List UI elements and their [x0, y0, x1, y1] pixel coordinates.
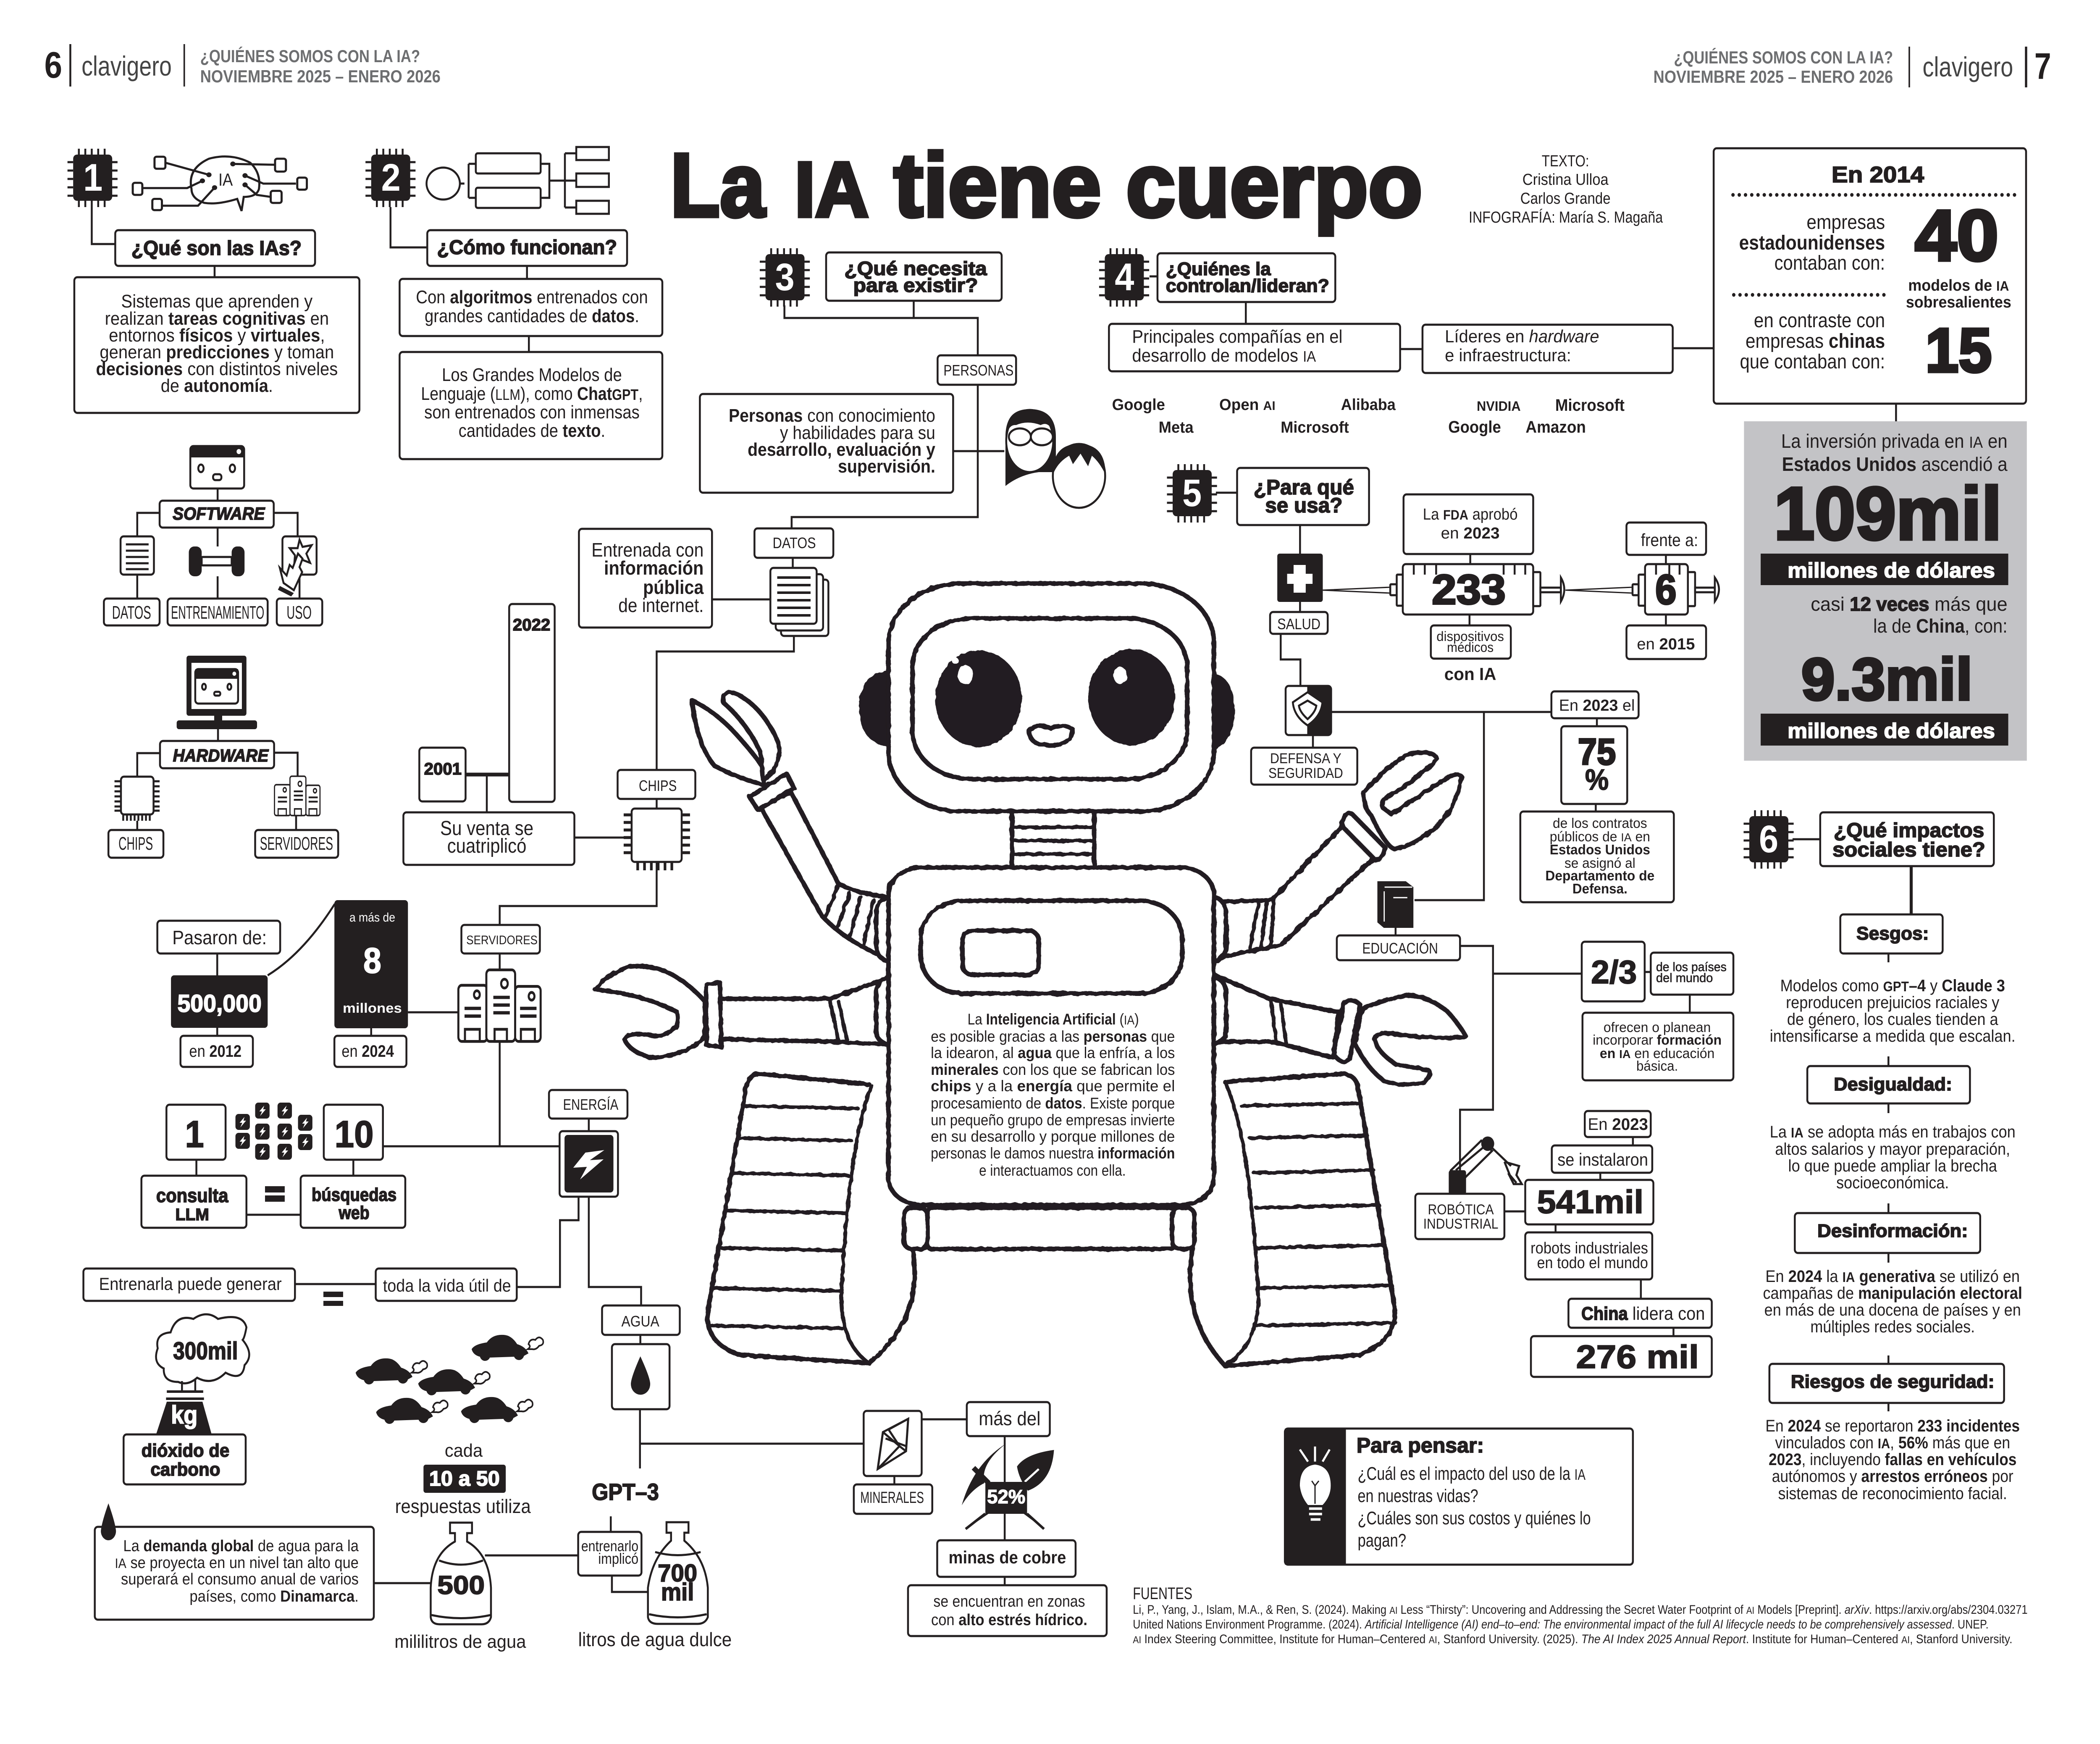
panel: water demand: GPT–3: [592, 1479, 659, 1505]
icon: people: [1005, 409, 1105, 508]
panel: models in 2014: en contraste con: [1754, 309, 1885, 331]
text: robot chest: La Inteligencia Artificial (IA): [968, 1011, 1139, 1028]
panel: section 5 what it is used for: en 2023: [1441, 524, 1500, 542]
panel: models in 2014: 15: [1925, 315, 1992, 385]
panel: section 5 what it is used for: En 2023 el: [1559, 696, 1635, 714]
header left: ¿QUIÉNES SOMOS CON LA IA?: [200, 46, 420, 66]
header left: NOVIEMBRE 2025 – ENERO 2026: [200, 67, 441, 86]
chart: chip sales 2001 vs 2022: 2001: [424, 760, 462, 778]
icon: monitor: [177, 656, 257, 729]
icon: gem: [878, 1419, 908, 1469]
panel: carbon emissions: respuestas utiliza: [395, 1496, 531, 1517]
text: robot chest: [931, 1011, 1175, 1179]
panel: section 1 what are AIs: decisiones con distintos niveles: [96, 358, 338, 379]
icon: energy tiles: [236, 1103, 312, 1160]
robot ears: [859, 670, 1234, 751]
text: model companies: Microsoft: [1281, 418, 1349, 436]
panel: servers: millones: [343, 1001, 402, 1016]
panel: energy comparison: consulta: [156, 1185, 228, 1206]
header right: 7: [2034, 45, 2051, 87]
panel: section 3 what it needs: DATOS: [773, 535, 816, 552]
panel: section 2 how they work: Los Grandes Modelos de: [442, 364, 622, 385]
text: robot chest: en su desarrollo y porque millones de: [931, 1128, 1175, 1145]
chart: chip sales 2001 vs 2022: [403, 604, 575, 865]
panel: minerals: minas de cobre: [949, 1548, 1066, 1567]
title: tiene cuerpo: [894, 135, 1423, 236]
panel: education: 2/3: [1591, 954, 1637, 990]
text: robot chest: e interactuamos con ella.: [979, 1162, 1126, 1179]
panel: education: ofrecen o planean: [1604, 1020, 1711, 1035]
panel: models in 2014: que contaban con:: [1740, 350, 1885, 373]
panel: section 3 what it needs: CHIPS: [639, 778, 677, 794]
panel: section 2 how they work: 2: [381, 156, 401, 199]
panel: section 4 who leads: e infraestructura:: [1445, 346, 1571, 365]
panel: hardware: CHIPS: [118, 833, 153, 854]
panel: section 4 who leads: Principales compañías en el: [1132, 326, 1342, 347]
panel: section 1 what are AIs: generan predicciones y toman: [100, 341, 334, 362]
robot neck: [1012, 809, 1094, 870]
text: model companies: Open AI: [1219, 395, 1276, 413]
robot head: [888, 583, 1214, 811]
text: robot chest: minerales con los que se fabrican los: [931, 1061, 1175, 1078]
subsection: riesgos de seguridad: vinculados con IA, 56% más que en: [1775, 1434, 2010, 1452]
panel: energy comparison: [142, 1090, 627, 1228]
text: robot chest: la idearon, al agua que la enfría, a los: [931, 1044, 1175, 1061]
text: robot chest: personas le damos nuestra información: [931, 1145, 1175, 1162]
subsection: desinformacion: [1763, 1213, 2022, 1336]
panel: section 5 what it is used for: Departamento de: [1545, 868, 1654, 883]
panel: education: básica.: [1636, 1058, 1678, 1074]
panel: section 5 what it is used for: 75: [1578, 731, 1616, 772]
panel: section 3 what it needs: [403, 248, 1105, 870]
panel: water demand: superará el consumo anual de varios: [121, 1570, 359, 1588]
panel: education: EDUCACIÓN: [1362, 940, 1438, 957]
panel: industrial robotics: China lidera con: [1581, 1303, 1705, 1324]
panel: private investment: casi 12 veces más que: [1811, 594, 2008, 615]
header right: ¿QUIÉNES SOMOS CON LA IA?: [1674, 47, 1893, 67]
panel: private investment: Estados Unidos ascendió a: [1782, 454, 2008, 475]
panel: industrial robotics: En 2023: [1588, 1115, 1648, 1134]
icon: software window: [190, 446, 244, 489]
subsection: sesgos: reproducen prejuicios raciales y: [1786, 993, 1999, 1012]
text: hardware companies: NVIDIA: [1477, 399, 1521, 414]
panel: section 5 what it is used for: 5: [1182, 471, 1202, 515]
robot body: [876, 867, 1226, 1249]
robot upper left arm: [692, 693, 888, 959]
icon: smoke cloud and chimney: kg: [171, 1401, 197, 1429]
subsection: sesgos: intensificarse a medida que escalan.: [1770, 1027, 2016, 1045]
icon: syringe 233: 233: [1432, 567, 1506, 613]
panel: section 5 what it is used for: DEFENSA Y: [1270, 751, 1341, 766]
icon: syringe 233: [1390, 564, 1564, 615]
panel: section 3 what it needs: desarrollo, evaluación y: [748, 439, 936, 460]
subsection: sesgos: [1770, 914, 2016, 1045]
chart: chip sales 2001 vs 2022: Su venta se: [440, 817, 533, 839]
panel: section 1 what are AIs: IA: [218, 170, 233, 189]
panel: servers: en 2012: [189, 1042, 242, 1061]
icon: health cross: [1277, 554, 1323, 602]
credits: INFOGRAFÍA: María S. Magaña: [1469, 208, 1663, 226]
panel: energy comparison: ENERGÍA: [563, 1096, 618, 1113]
panel: water demand: La demanda global de agua para la: [123, 1537, 359, 1555]
panel: section 2 how they work: grandes cantidades de datos.: [425, 305, 639, 326]
panel: water demand: países, como Dinamarca.: [189, 1587, 359, 1605]
subsection: sesgos: de género, los cuales tienden a: [1787, 1010, 1998, 1029]
panel: industrial robotics: 541mil: [1537, 1184, 1643, 1220]
text: sources: Li, P., Yang, J., Islam, M.A., & Ren, S. (2024). Making AI Less “Thirsty”: Uncovering and Addressing the Secret Water Footprint of AI Models [Preprint]. arXiv. https://arxiv.org/abs/2304.03271: [1133, 1603, 2028, 1617]
panel: private investment: La inversión privada en IA en: [1781, 431, 2008, 452]
panel: industrial robotics: robots industriales: [1530, 1239, 1648, 1257]
panel: education: en IA en educación: [1600, 1046, 1714, 1061]
panel: education: de los países: [1656, 960, 1727, 974]
subsection: desigualdad: [1770, 1066, 2016, 1192]
panel: energy comparison: web: [339, 1202, 370, 1223]
panel: section 2 how they work: Lenguaje (LLM), como ChatGPT,: [421, 383, 643, 404]
panel: minerals: [854, 1402, 1107, 1636]
panel: section 4 who leads: Líderes en hardware: [1445, 327, 1599, 346]
panel: section 2 how they work: son entrenados con inmensas: [424, 402, 640, 422]
panel: software: SOFTWARE: [173, 504, 265, 523]
panel: hardware: HARDWARE: [173, 746, 269, 765]
text: hardware companies: Microsoft: [1555, 396, 1625, 415]
text: robot chest: procesamiento de datos. Existe porque: [931, 1095, 1175, 1112]
robot upper right arm: [1214, 825, 1377, 959]
subsection: desinformacion: Desinformación:: [1817, 1220, 1968, 1241]
subsection: riesgos de seguridad: 2023, incluyendo fallas en vehículos: [1769, 1450, 2016, 1469]
icon: pickaxe and shovel: [962, 1444, 1054, 1529]
panel: section 3 what it needs: supervisión.: [838, 456, 935, 476]
panel: carbon emissions: 10 a 50: [429, 1467, 500, 1491]
text: robot chest: es posible gracias a las personas que: [931, 1028, 1175, 1045]
chart: chip sales 2001 vs 2022: cuatriplicó: [447, 835, 526, 857]
panel: section 1 what are AIs: entornos físicos y virtuales,: [109, 325, 325, 345]
panel: industrial robotics: ROBÓTICA: [1428, 1201, 1494, 1217]
chart: chip sales 2001 vs 2022: 2022: [513, 616, 550, 634]
panel: water demand: mililitros de agua: [394, 1631, 526, 1652]
robot lower right arm: [1214, 974, 1339, 1058]
icon: documents: [770, 568, 828, 636]
text: robot chest: chips y a la energía que permite el: [931, 1077, 1175, 1095]
panel: section 3 what it needs: ¿Qué necesita: [844, 258, 987, 279]
panel: private investment: millones de dólares: [1788, 720, 1995, 743]
panel: section 1 what are AIs: Sistemas que aprenden y: [121, 291, 312, 311]
panel: section 1 what are AIs: ¿Qué son las IAs?: [131, 237, 302, 259]
panel: water demand: implicó: [598, 1551, 638, 1567]
panel: section 1 what are AIs: de autonomía.: [161, 375, 273, 396]
panel: models in 2014: 40: [1915, 195, 1999, 276]
credits: Carlos Grande: [1520, 189, 1611, 207]
panel: servers: Pasaron de:: [172, 927, 267, 948]
panel: para pensar: Para pensar:: [1357, 1434, 1484, 1458]
panel: carbon emissions: [84, 1269, 543, 1517]
subsection: riesgos de seguridad: [1765, 1364, 2020, 1503]
panel: servers: SERVIDORES: [466, 933, 538, 947]
panel: section 3 what it needs: Entrenada con: [591, 539, 704, 561]
panel: section 4 who leads: [1099, 248, 1673, 436]
subsection: desigualdad: Desigualdad:: [1834, 1074, 1952, 1094]
panel: software: USO: [286, 602, 312, 622]
panel: private investment: [1744, 421, 2027, 761]
header right: clavigero: [1923, 52, 2013, 83]
panel: industrial robotics: [1415, 1111, 1712, 1377]
icon: chip: [115, 777, 160, 821]
panel: section 4 who leads: ¿Quiénes la: [1166, 258, 1271, 279]
title: IA: [795, 146, 869, 233]
panel: section 5 what it is used for: públicos de IA en: [1550, 829, 1650, 844]
icon: robot arm: [1449, 1137, 1522, 1194]
panel: private investment: 109mil: [1774, 472, 2002, 555]
subsection: desigualdad: socioeconómica.: [1836, 1174, 1949, 1192]
icon: 700 mil liters bottle: [648, 1522, 708, 1624]
panel: software: DATOS: [112, 602, 151, 622]
panel: section 3 what it needs: Personas con conocimiento: [729, 405, 935, 425]
panel: section 6 social impacts: [1743, 810, 2022, 1503]
robot right track: [1190, 1074, 1396, 1366]
panel: carbon emissions: dióxido de: [142, 1440, 229, 1460]
header right: [1654, 45, 2051, 87]
panel: private investment: la de China, con:: [1873, 615, 2008, 637]
panel: models in 2014: contaban con:: [1774, 252, 1885, 274]
panel: minerals: 52%: [987, 1486, 1025, 1508]
header right: NOVIEMBRE 2025 – ENERO 2026: [1654, 67, 1893, 87]
panel: section 1 what are AIs: realizan tareas cognitivas en: [105, 308, 329, 328]
panel: section 6 social impacts: ¿Qué impactos: [1834, 819, 1984, 841]
title: [670, 135, 1423, 236]
icon: 700 mil liters bottle: mil: [661, 1579, 694, 1606]
subsection: desinformacion: múltiples redes sociales.: [1810, 1318, 1975, 1336]
panel: models in 2014: [1714, 148, 2026, 404]
text: model companies: Meta: [1159, 418, 1194, 436]
title: La: [670, 135, 766, 236]
panel: carbon emissions: cada: [445, 1440, 483, 1460]
panel: energy comparison: LLM: [175, 1206, 209, 1224]
subsection: desigualdad: lo que puede ampliar la brecha: [1788, 1157, 1998, 1175]
text: sources: [1133, 1584, 2028, 1646]
panel: section 5 what it is used for: SEGURIDAD: [1268, 765, 1343, 781]
icon: syringe 6: 6: [1655, 567, 1677, 613]
credits: TEXTO:: [1542, 152, 1589, 170]
panel: section 5 what it is used for: ¿Para qué: [1254, 476, 1354, 499]
icon: light bulb: [1300, 1447, 1331, 1519]
panel: carbon emissions: Entrenarla puede generar: [99, 1274, 282, 1294]
icon: smoke cloud and chimney: 300mil: [173, 1337, 238, 1365]
panel: water demand: litros de agua dulce: [578, 1629, 732, 1650]
panel: education: [1337, 881, 1733, 1080]
panel: models in 2014: empresas chinas: [1746, 330, 1885, 352]
panel: section 3 what it needs: información: [604, 557, 704, 579]
subsection: sesgos: Modelos como GPT–4 y Claude 3: [1780, 977, 2005, 995]
text: model companies: Alibaba: [1341, 395, 1396, 413]
panel: carbon emissions: carbono: [150, 1459, 220, 1479]
panel: water demand: [95, 1305, 732, 1652]
panel: software: [104, 446, 322, 625]
panel: servers: 8: [363, 941, 381, 981]
panel: section 3 what it needs: para existir?: [853, 275, 978, 296]
panel: section 6 social impacts: 6: [1759, 817, 1778, 861]
panel: section 5 what it is used for: %: [1585, 764, 1609, 796]
panel: servers: en 2024: [341, 1042, 394, 1061]
panel: industrial robotics: INDUSTRIAL: [1423, 1216, 1498, 1232]
text: sources: FUENTES: [1133, 1584, 1192, 1603]
panel: servers: [158, 900, 541, 1067]
panel: section 4 who leads: desarrollo de modelos IA: [1132, 345, 1316, 365]
subsection: desinformacion: En 2024 la IA generativa se utilizó en: [1765, 1267, 2020, 1286]
icon: defense shield: [1286, 686, 1331, 735]
panel: minerals: MINERALES: [860, 1488, 924, 1506]
panel: water demand: entrenarlo: [581, 1538, 638, 1555]
header left: 6: [45, 44, 62, 86]
panel: industrial robotics: 276 mil: [1576, 1339, 1699, 1375]
panel: section 5 what it is used for: [1167, 464, 1719, 902]
icon: main chip: [624, 809, 690, 870]
panel: minerals: se encuentran en zonas: [933, 1592, 1085, 1610]
robot left track: [708, 1074, 915, 1363]
panel: hardware: SERVIDORES: [260, 833, 333, 854]
panel: energy comparison: búsquedas: [312, 1184, 396, 1205]
text: sources: United Nations Environment Programme. (2024). Artificial Intelligence (AI) end–to–end: The environmental impact of the full AI lifecycle needs to be comprehensively assessed. UNEP.: [1133, 1618, 1989, 1631]
panel: water demand: AGUA: [622, 1313, 659, 1330]
panel: para pensar: en nuestras vidas?: [1358, 1485, 1478, 1506]
panel: section 5 what it is used for: médicos: [1447, 640, 1494, 655]
panel: software: ENTRENAMIENTO: [171, 602, 264, 622]
panel: para pensar: ¿Cuáles son sus costos y quiénes lo: [1358, 1508, 1591, 1528]
panel: private investment: 9.3mil: [1801, 646, 1973, 712]
subsection: sesgos: Sesgos:: [1856, 923, 1929, 943]
panel: section 5 what it is used for: de los contratos: [1553, 816, 1647, 831]
icon: 700 mil liters bottle: 700: [658, 1560, 697, 1587]
panel: section 2 how they work: ¿Cómo funcionan?: [437, 236, 617, 258]
panel: section 4 who leads: controlan/lideran?: [1166, 275, 1329, 296]
panel: section 5 what it is used for: en 2015: [1637, 635, 1695, 653]
subsection: desinformacion: campañas de manipulación electoral: [1763, 1284, 2022, 1303]
panel: servers: 500,000: [177, 990, 262, 1017]
panel: section 3 what it needs: PERSONAS: [943, 362, 1013, 379]
panel: para pensar: ¿Cuál es el impacto del uso de la IA: [1358, 1463, 1586, 1484]
panel: section 5 what it is used for: se usa?: [1265, 494, 1342, 517]
robot lower left arm: [596, 966, 886, 1058]
icon: cars: [356, 1335, 543, 1424]
panel: section 1 what are AIs: 1: [83, 156, 102, 199]
panel: hardware: [108, 656, 338, 858]
text: sources: AI Index Steering Committee, Institute for Human–Centered AI, Stanford University. (2025). The AI Index 2025 Annual Report. Institute for Human–Centered AI, Stanford University.: [1133, 1632, 2012, 1646]
panel: section 3 what it needs: y habilidades para su: [780, 422, 935, 443]
panel: section 5 what it is used for: Estados Unidos: [1550, 842, 1650, 857]
panel: section 3 what it needs: de internet.: [618, 595, 704, 616]
subsection: riesgos de seguridad: autónomos y arrestos erróneos por: [1772, 1467, 2013, 1486]
icon: brain network: [133, 156, 307, 211]
panel: minerals: con alto estrés hídrico.: [931, 1610, 1087, 1628]
panel: section 5 what it is used for: se asignó al: [1564, 856, 1635, 871]
text: hardware companies: Google: [1448, 418, 1501, 436]
panel: models in 2014: sobresalientes: [1906, 293, 2011, 311]
panel: minerals: más del: [979, 1408, 1040, 1429]
icon: model diagram: [427, 147, 609, 214]
panel: section 2 how they work: Con algoritmos entrenados con: [416, 286, 648, 307]
panel: section 5 what it is used for: Defensa.: [1572, 881, 1628, 896]
panel: education: del mundo: [1656, 971, 1713, 985]
panel: models in 2014: empresas: [1806, 211, 1885, 233]
text: model companies: Google: [1112, 395, 1165, 413]
subsection: desigualdad: La IA se adopta más en trabajos con: [1770, 1123, 2016, 1141]
panel: models in 2014: En 2014: [1832, 162, 1924, 187]
icon: book: [1377, 881, 1413, 928]
panel: industrial robotics: se instalaron: [1557, 1150, 1648, 1169]
panel: para pensar: pagan?: [1358, 1530, 1406, 1550]
connector lines: [92, 207, 1911, 1592]
subsection: desigualdad: altos salarios y mayor preparación,: [1775, 1140, 2010, 1158]
icon: 500 ml bottle: 500: [437, 1571, 485, 1600]
panel: section 5 what it is used for: SALUD: [1277, 616, 1320, 633]
panel: section 6 social impacts: sociales tiene?: [1832, 838, 1985, 861]
panel: section 4 who leads: 4: [1115, 255, 1134, 299]
text: model companies: [1112, 395, 1396, 436]
subsection: riesgos de seguridad: sistemas de reconocimiento facial.: [1778, 1484, 2007, 1503]
panel: energy comparison: 10: [335, 1113, 374, 1156]
credits: [1469, 152, 1663, 226]
panel: servers: a más de: [349, 911, 395, 925]
panel: energy comparison: 1: [185, 1113, 204, 1156]
panel: water demand: IA se proyecta en un nivel tan alto que: [115, 1553, 359, 1571]
text: hardware companies: [1448, 396, 1625, 436]
icon: smoke cloud and chimney: [156, 1314, 249, 1434]
robot illustration: [596, 583, 1466, 1366]
panel: carbon emissions: toda la vida útil de: [383, 1276, 511, 1295]
panel: section 2 how they work: [365, 147, 662, 459]
icon: syringe 6: [1633, 564, 1719, 615]
robot right claws: [1333, 753, 1466, 1085]
subsection: riesgos de seguridad: Riesgos de seguridad:: [1791, 1371, 1995, 1392]
panel: section 5 what it is used for: con IA: [1444, 665, 1496, 684]
panel: private investment: millones de dólares: [1788, 559, 1995, 583]
panel: section 5 what it is used for: dispositivos: [1436, 629, 1504, 644]
panel: section 5 what it is used for: La FDA aprobó: [1423, 505, 1517, 523]
credits: Cristina Ulloa: [1522, 170, 1609, 188]
panel: models in 2014: estadounidenses: [1739, 231, 1885, 254]
panel: section 3 what it needs: 3: [775, 255, 795, 299]
header left: [45, 44, 441, 87]
panel: section 2 how they work: cantidades de texto.: [459, 420, 605, 441]
panel: section 1 what are AIs: [68, 149, 360, 413]
panel: section 3 what it needs: pública: [643, 577, 704, 598]
panel: section 5 what it is used for: frente a:: [1641, 531, 1698, 550]
panel: education: incorporar formación: [1593, 1032, 1722, 1048]
panel: industrial robotics: en todo el mundo: [1537, 1253, 1648, 1271]
text: hardware companies: Amazon: [1525, 418, 1586, 436]
header left: clavigero: [81, 51, 172, 82]
subsection: desinformacion: en más de una docena de países y en: [1764, 1301, 2021, 1319]
icon: 500 ml bottle: [430, 1523, 491, 1624]
panel: para pensar: [1285, 1429, 1633, 1565]
text: robot chest: un pequeño grupo de empresas invierte: [931, 1111, 1175, 1129]
panel: models in 2014: modelos de IA: [1908, 276, 2009, 294]
subsection: riesgos de seguridad: En 2024 se reportaron 233 incidentes: [1765, 1417, 2020, 1435]
